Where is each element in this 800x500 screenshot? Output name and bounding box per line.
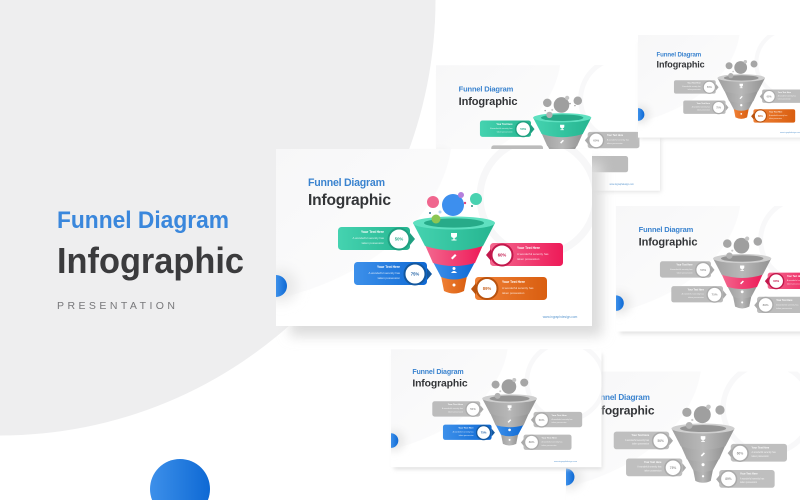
bubble: green over funnel rim [432,214,440,224]
icon: trophy [451,233,457,240]
callout: pink 60%: A wonderful serenity has [517,252,549,256]
callout: blue 75%: taken possession [378,276,400,280]
callout: orange 89%: taken possession [502,291,525,295]
slide: bottom right, all grey: Your Text Here [644,461,662,464]
slide: right middle, pink highlighted: 89% [763,303,769,307]
slide: top middle, teal highlighted: Infographic [459,96,518,108]
funnel segment: blue [433,262,475,280]
slide: bottom right, all grey: taken possession [632,443,650,446]
slide: bottom middle, blue highlighted: taken possession [448,411,463,414]
slide: top middle, teal highlighted: 60% [593,138,600,142]
slide: top right, orange highlighted: Infographic [657,59,705,69]
slide: bottom right, all grey: Your Text Here [632,434,650,437]
slide: top right, orange highlighted: taken possession [697,108,710,111]
slide: top right, orange highlighted: A wonderful serenity has [769,114,787,117]
slide: right middle, pink highlighted: taken possession [776,307,792,310]
slide: bottom right, all grey: Infographic [591,404,655,418]
slide: bottom middle, blue highlighted: Your Text Here [542,437,558,440]
slide: right middle, pink highlighted: Infographic [639,237,698,249]
slide: top right, orange highlighted: Your Text Here [687,82,701,85]
slide: bottom middle, blue highlighted: 50% [470,407,476,411]
slide: bottom middle, blue highlighted: www.ingraphdesign.com [554,460,577,463]
slide: top right, orange highlighted: A wonderful serenity has [682,85,701,88]
slide: top right, orange highlighted: Your Text Here [697,102,710,105]
slide: right middle, pink highlighted: taken possession [688,296,704,299]
slide: top right, orange highlighted: 89% [758,115,764,118]
slide: right middle, pink highlighted: A wonderful serenity has [682,293,704,296]
slide: bottom middle, blue highlighted: 89% [529,440,535,444]
funnel rim [413,216,495,230]
callout: blue 75%: 75% [411,272,419,276]
slide: top middle, teal highlighted: www.ingraphdesign.com [610,183,634,186]
callout: pink 60%: Your Text Here [517,246,540,250]
slide: bottom middle, blue highlighted: Your Text Here [448,403,464,406]
icon: people [451,267,457,273]
slide: bottom middle, blue highlighted: Funnel Diagram [412,369,464,376]
slide: top middle, teal highlighted: taken possession [497,131,513,134]
slide title: Infographic: Infographic [308,192,391,209]
slide: top right, orange highlighted: A wonderful serenity has [692,106,710,109]
slide: bottom middle, blue highlighted: 60% [539,418,545,422]
slide: right middle, pink highlighted: Your Text Here [688,288,705,291]
slide: bottom right, all grey: Your Text Here [740,473,758,476]
slide: bottom middle, blue highlighted: A wonderful serenity has [442,407,463,410]
slide: bottom right, all grey: A wonderful serenity has [752,451,777,454]
funnel segment: pink [425,245,483,266]
heading: Infographic: Infographic [57,240,244,281]
slide: bottom middle, blue highlighted: Infographic [412,379,468,390]
callout: orange 89%: A wonderful serenity has [502,286,534,290]
slide: bottom right, all grey: 89% [725,477,732,481]
callout: blue 75% [354,262,432,285]
main heading [57,207,244,312]
slide: top right, orange highlighted: Your Text Here [778,91,791,94]
slide: top right, orange highlighted: taken possession [769,117,782,120]
subheading: presentation: PRESENTATION [57,300,175,312]
background circle [0,0,436,436]
slide: bottom right, all grey: taken possession [740,481,758,484]
slide: top middle, teal highlighted: 50% [520,127,527,131]
slide: bottom right, all grey: Your Text Here [752,447,770,450]
callout: pink 60%: taken possession [517,257,540,261]
slide: top right, orange highlighted: taken possession [688,88,701,91]
funnel segment: teal [413,223,495,250]
slide: bottom middle, blue highlighted [384,343,604,469]
icon: blue half circle [276,275,287,297]
slide: bottom middle, blue highlighted: A wonderful serenity has [552,418,573,421]
callout: teal 50%: Your Text Here [361,230,384,234]
slide: top right, orange highlighted: 60% [767,95,772,98]
slide: bottom middle, blue highlighted: 75% [481,431,487,435]
slide: top right, orange highlighted: taken possession [778,97,791,100]
slide title: Funnel Diagram: Funnel Diagram [308,177,385,189]
slide: top middle, teal highlighted: Funnel Diagram [459,84,514,93]
slide: right middle, pink highlighted: Your Text Here [776,299,793,302]
callout: orange 89% [471,277,547,300]
slide: bottom right, all grey: 60% [737,451,743,455]
callout: teal 50%: 50% [395,236,403,242]
panel: main colored slide [265,139,602,336]
callout: orange 89%: 89% [483,286,491,291]
slide: bottom middle, blue highlighted: taken possession [542,444,556,447]
slide: top right, orange highlighted: www.ingraphdesign.com [780,131,800,134]
slide: bottom right, all grey: Funnel Diagram [591,393,650,402]
slide: bottom right, all grey: taken possession [644,470,662,473]
slide: top right, orange highlighted: Funnel Diagram [657,51,702,58]
slide: bottom middle, blue highlighted: A wonderful serenity has [453,431,474,434]
slide: bottom middle, blue highlighted: Your Text Here [552,414,568,417]
slide: top middle, teal highlighted: taken possession [607,142,623,145]
slide: top middle, teal highlighted: A wonderful serenity has [607,138,629,141]
slide: bottom right, all grey [558,364,800,500]
slide: right middle, pink highlighted: Funnel Diagram [639,225,694,234]
slide: top right, orange highlighted: Your Text Here [769,111,782,114]
slide: bottom right, all grey: taken possession [752,455,769,458]
slide: top middle, teal highlighted: A wonderful serenity has [490,127,513,130]
heading: Funnel Diagram: Funnel Diagram [57,207,229,234]
slide: bottom middle, blue highlighted: taken possession [552,421,566,424]
slide: top middle, teal highlighted [428,58,663,192]
slide: right middle, pink highlighted [608,199,800,334]
slide: top middle, teal highlighted: Your Text Here [607,134,624,137]
slide: bottom right, all grey: A wonderful serenity has [740,477,765,480]
funnel segment: orange [441,276,467,294]
callout: blue 75%: Your Text Here [377,265,400,269]
blue circle at bottom [150,459,210,500]
slide: top right, orange highlighted [632,29,800,139]
slide: bottom right, all grey: 75% [670,466,676,470]
slide: bottom middle, blue highlighted: A wonderful serenity has [542,441,563,444]
slide: bottom right, all grey: 50% [657,439,664,443]
slide: bottom middle, blue highlighted: Your Text Here [458,427,474,430]
callout: orange 89%: Your Text Here [502,280,525,284]
slide: right middle, pink highlighted: taken possession [677,271,693,274]
callout: pink 60% [486,243,563,266]
website url: www.ingraphdesign.com [543,315,578,319]
slide: bottom right, all grey: A wonderful serenity has [637,466,662,469]
slide: top right, orange highlighted: A wonderful serenity has [778,95,796,98]
callout: pink 60%: 60% [498,252,506,258]
icon: rocket [451,254,456,260]
bubbles above funnel [427,192,482,216]
callout: teal 50% [338,227,415,250]
slide: top right, orange highlighted: 50% [707,86,713,89]
slide: right middle, pink highlighted: A wonderful serenity has [670,268,693,271]
slide: right middle, pink highlighted: Your Text Here [676,264,693,267]
slide: top middle, teal highlighted: Your Text Here [496,123,513,126]
slide: right middle, pink highlighted: 60% [773,279,780,283]
callout: blue 75%: A wonderful serenity has [368,271,401,275]
slide: right middle, pink highlighted: A wonderful serenity has [776,303,799,306]
slide: right middle, pink highlighted: 75% [712,293,718,297]
icon: star [452,284,456,286]
callout: teal 50%: A wonderful serenity has [352,236,385,240]
slide: right middle, pink highlighted: 50% [700,268,707,272]
slide: bottom middle, blue highlighted: taken possession [459,434,474,437]
slide: top right, orange highlighted: 75% [716,106,722,109]
callout: teal 50%: taken possession [362,241,384,245]
slide: bottom right, all grey: A wonderful serenity has [625,439,650,442]
funnel [413,216,495,294]
